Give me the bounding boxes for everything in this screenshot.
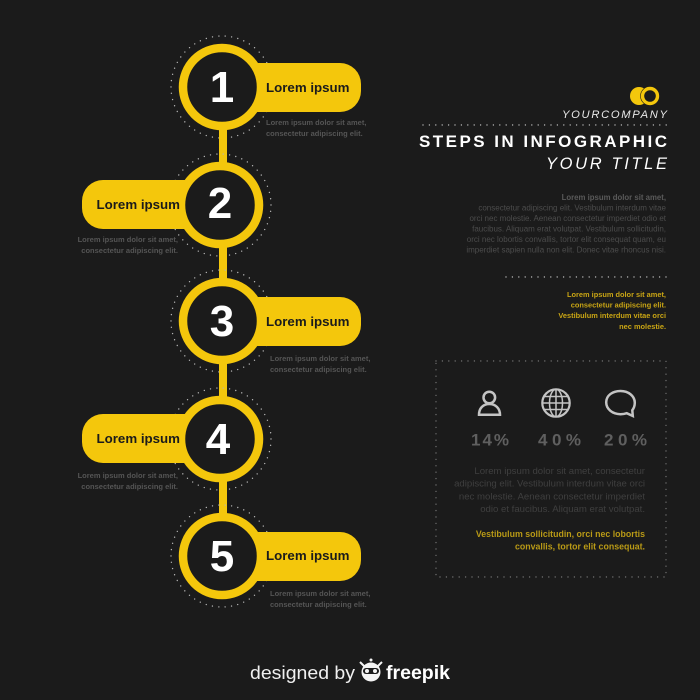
- intro paragraph: faucibus. Aliquam erat volutpat. Vestibulum sollicitudin,: [472, 224, 666, 234]
- intro paragraph: consectetur adipiscing elit. Vestibulum interdum vitae: [478, 204, 667, 212]
- step 4: 4: [206, 415, 231, 464]
- panel paragraph: adipiscing elit. Vestibulum interdum vitae orci: [454, 479, 645, 490]
- step 1: consectetur adipiscing elit.: [266, 129, 363, 138]
- dotted rule: header: [423, 124, 668, 126]
- yellow callout: nec molestie.: [619, 322, 666, 331]
- step 5: consectetur adipiscing elit.: [270, 600, 367, 609]
- step 4: consectetur adipiscing elit.: [81, 482, 178, 491]
- panel paragraph: Lorem ipsum dolor sit amet, consectetur: [474, 466, 646, 477]
- yellow callout: Vestibulum interdum vitae orci: [558, 311, 666, 320]
- connector 4-5: [219, 472, 227, 522]
- panel: statistics: [436, 361, 666, 577]
- stat: 20%: 20%: [604, 430, 647, 450]
- yellow callout: consectetur adipiscing elit.: [571, 300, 666, 310]
- icon: speech bubble: [606, 391, 635, 416]
- step 3: Lorem ipsum dolor sit amet,: [270, 354, 370, 363]
- footer credit: designed by: [250, 663, 355, 683]
- step 2: Lorem ipsum dolor sit amet,: [78, 235, 178, 244]
- panel yellow note: Vestibulum sollicitudin, orci nec lobortis: [476, 529, 645, 539]
- step 4: Lorem ipsum dolor sit amet,: [78, 471, 178, 480]
- panel yellow note: convallis, tortor elit consequat.: [515, 542, 645, 552]
- panel paragraph: nec molestie. Aenean consectetur imperdiet: [459, 491, 645, 502]
- step 4: [78, 388, 271, 522]
- subtitle: YOUR TITLE: [546, 155, 668, 173]
- step 1: [171, 36, 366, 172]
- step 2: [78, 154, 271, 288]
- connector 2-3: [219, 238, 227, 288]
- step 5: 5: [210, 532, 234, 581]
- step 5: Lorem ipsum: [266, 548, 350, 563]
- icon: person: [479, 392, 500, 415]
- intro paragraph: orci nec molestie. Aenean consectetur imperdiet odio et: [469, 214, 667, 223]
- stat: 40%: 40%: [538, 430, 581, 450]
- step 2: consectetur adipiscing elit.: [81, 246, 178, 255]
- step 5: Lorem ipsum dolor sit amet,: [270, 589, 370, 598]
- step 1: Lorem ipsum: [266, 80, 350, 95]
- icon: globe: [542, 389, 570, 417]
- intro paragraph: imperdiet sapien nulla non elit. Donec vitae rhoncus nisi.: [466, 246, 666, 254]
- step 3: Lorem ipsum: [266, 314, 350, 329]
- footer credit: freepik: [386, 663, 450, 684]
- icon: freepik mascot: [360, 658, 382, 682]
- connector 1-2: [219, 120, 227, 172]
- step 1: Lorem ipsum dolor sit amet,: [266, 118, 366, 127]
- step 5: [171, 505, 370, 609]
- panel paragraph: odio et faucibus. Aliquam erat volutpat.: [480, 504, 645, 515]
- step 3: [171, 270, 370, 404]
- step 4: Lorem ipsum: [96, 431, 180, 446]
- connector 3-4: [219, 354, 227, 404]
- yellow callout: Lorem ipsum dolor sit amet,: [567, 290, 666, 299]
- intro paragraph: orci nec lobortis convallis, tortor elit consequat quam, eu: [467, 235, 666, 244]
- step 2: 2: [208, 179, 232, 228]
- step 2: Lorem ipsum: [96, 197, 180, 212]
- footer credit: [250, 658, 450, 684]
- stat: 14%: 14%: [471, 430, 509, 450]
- step 3: consectetur adipiscing elit.: [270, 365, 367, 374]
- title: STEPS IN INFOGRAPHIC: [419, 132, 667, 151]
- dotted rule: intro: [506, 276, 668, 278]
- step 1: 1: [210, 63, 234, 112]
- company logo: [630, 86, 660, 106]
- company name: YOURCOMPANY: [562, 109, 669, 121]
- intro paragraph: Lorem ipsum dolor sit amet,: [562, 193, 666, 202]
- step 3: 3: [210, 297, 234, 346]
